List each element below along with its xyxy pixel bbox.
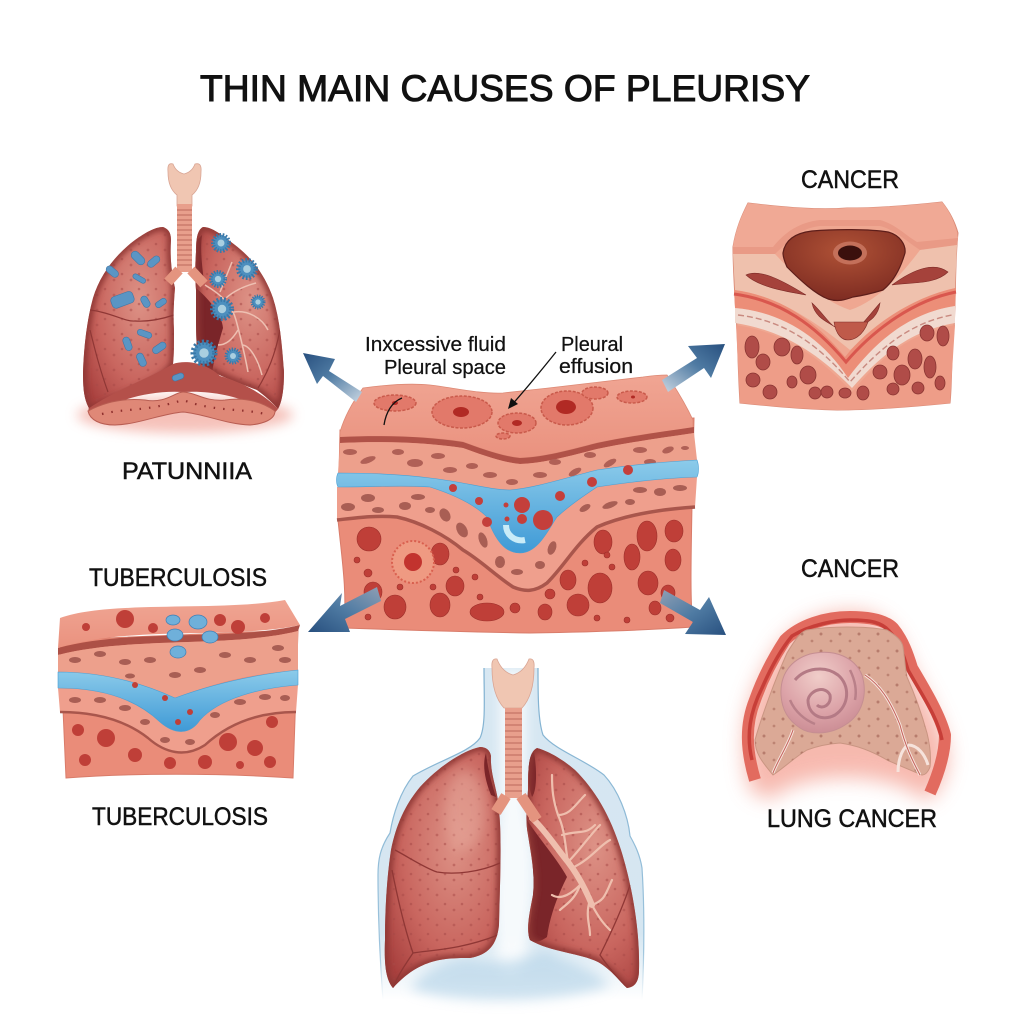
right lung: [195, 227, 284, 409]
central annotation: pleural effusion: Pleural: [561, 334, 623, 356]
dark line: [337, 507, 695, 590]
label: cancer top: CANCER: [801, 166, 899, 194]
pale upper band: [733, 245, 957, 350]
central annotation: excessive fluid: [365, 334, 506, 379]
fluid channel: [58, 670, 298, 732]
pale striated band: [735, 306, 955, 388]
left lung: [83, 227, 175, 408]
tissue base: [60, 630, 298, 778]
slit vessels: [746, 267, 948, 340]
red glow: [744, 612, 948, 800]
spiked cell: [392, 541, 434, 583]
larynx and trachea: [168, 164, 204, 284]
lower nodules: [745, 325, 949, 400]
diaphragm arch: [88, 362, 278, 416]
label: lung cancer: LUNG CANCER: [767, 805, 937, 833]
vessels: [773, 675, 928, 775]
glow beneath lungs: [77, 397, 293, 433]
pleural outer wall: [748, 617, 945, 793]
tissue interior: [755, 627, 930, 775]
top surface: [733, 202, 958, 247]
panel: lung cancer: [744, 612, 948, 800]
bacteria: [105, 250, 185, 382]
top surface: [340, 375, 693, 458]
left lung: [384, 747, 501, 988]
larynx and trachea: [492, 659, 537, 820]
viruses: [193, 235, 264, 364]
dark band: [58, 625, 300, 655]
panel: cancer tissue top right: [733, 202, 958, 410]
lower tissue cells: [354, 520, 683, 623]
central cavity: [783, 230, 905, 300]
diaphragm band: [88, 392, 275, 425]
fluid cells: [449, 465, 633, 530]
tissue block: [733, 202, 958, 410]
arrow: to cancer top: [662, 344, 725, 392]
top surface: [58, 600, 300, 648]
central annotation: excessive fluid: Pleural space: [384, 357, 506, 379]
right lung: [526, 748, 640, 988]
red layered band: [734, 288, 956, 378]
label: tuberculosis top: TUBERCULOSIS: [89, 564, 267, 592]
label: cancer lower: CANCER: [801, 555, 899, 583]
infected bronchial tree: [205, 262, 268, 375]
label: pneumonia: PATUNNIIA: [122, 458, 252, 485]
lower membrane: [58, 685, 298, 752]
bronchial tree: [532, 775, 612, 935]
arrow: to lung cancer: [660, 590, 726, 635]
spongy band: [338, 433, 697, 490]
bottom tissue base: [338, 418, 694, 633]
central annotation: pleural effusion: [559, 334, 633, 378]
spongy band: [58, 631, 298, 698]
arrow: to pneumonia: [303, 353, 362, 402]
red cells: [72, 610, 278, 769]
central annotation: excessive fluid: Inxcessive fluid: [365, 334, 506, 356]
surface lesions: [374, 387, 647, 439]
pointer lines: [384, 352, 556, 425]
pleural membrane: [378, 668, 644, 1000]
tumor: [781, 652, 864, 733]
pleural outline sides: [378, 668, 644, 1000]
title: THIN MAIN CAUSES OF PLEURISY: [200, 68, 810, 109]
panel: tuberculosis tissue: [58, 600, 300, 778]
arrow: to tuberculosis: [308, 587, 381, 632]
panel: healthy lungs: [378, 659, 645, 1000]
panel: pneumonia lungs: [77, 164, 293, 433]
central tissue diagram: [336, 352, 698, 633]
lower membrane: [337, 477, 697, 590]
central annotation: pleural effusion: effusion: [559, 356, 633, 378]
label: tuberculosis bottom: TUBERCULOSIS: [92, 803, 268, 831]
pleural fluid channel: [336, 460, 698, 553]
pale interior glow: [495, 670, 534, 979]
lower flesh: [736, 325, 955, 410]
blue cells: [166, 615, 218, 658]
dark band: [340, 427, 694, 464]
